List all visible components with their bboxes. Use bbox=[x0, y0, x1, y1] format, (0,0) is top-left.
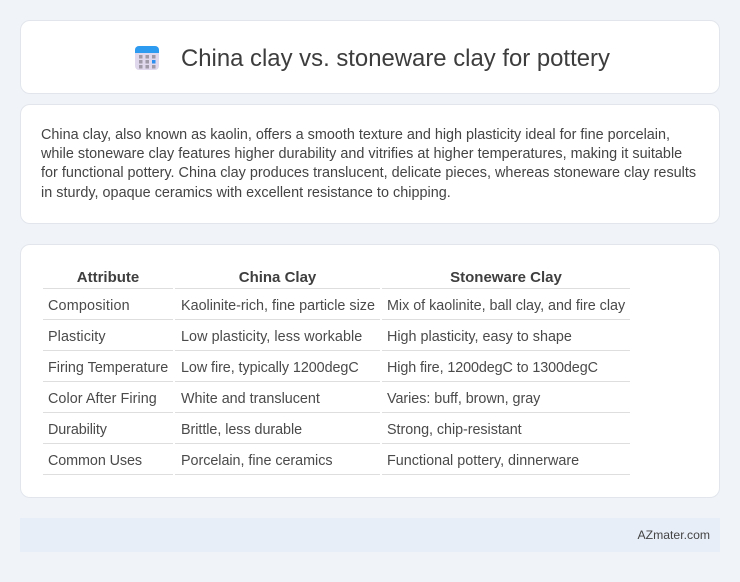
footer bar bbox=[20, 518, 720, 552]
panel: title card bbox=[20, 20, 720, 94]
row: plasticity bbox=[48, 329, 572, 345]
row: common uses: Functional pottery, dinnerware bbox=[387, 453, 579, 469]
icon: calendar bbox=[135, 46, 159, 70]
row: composition: Composition bbox=[48, 298, 130, 314]
row: common uses: Porcelain, fine ceramics bbox=[181, 453, 332, 469]
title: China clay vs. stoneware clay for pottery bbox=[181, 45, 610, 72]
row: firing temperature bbox=[48, 360, 598, 376]
row: plasticity: Low plasticity, less workable bbox=[181, 329, 362, 345]
row: firing temperature: Firing Temperature bbox=[48, 360, 168, 376]
row: durability: Brittle, less durable bbox=[181, 422, 302, 438]
row: composition: Kaolinite-rich, fine particle size bbox=[181, 298, 375, 314]
row: composition: Mix of kaolinite, ball clay, and fire clay bbox=[387, 298, 625, 314]
intro text: while stoneware clay features higher durability and vitrifies at higher temperatures, making it suitable bbox=[41, 146, 682, 162]
table header: China Clay bbox=[239, 269, 316, 286]
table header: Stoneware Clay bbox=[450, 269, 562, 286]
row: composition bbox=[48, 298, 626, 314]
comparison table bbox=[43, 269, 630, 475]
row: firing temperature: High fire, 1200degC to 1300degC bbox=[387, 360, 598, 376]
row: color after firing bbox=[48, 391, 540, 407]
intro text: China clay, also known as kaolin, offers a smooth texture and high plasticity ideal for fine porcelain, bbox=[41, 127, 670, 143]
row: firing temperature: Low fire, typically 1200degC bbox=[181, 360, 359, 376]
row: durability: Strong, chip-resistant bbox=[387, 422, 522, 438]
intro text bbox=[41, 127, 696, 201]
row: color after firing: White and translucent bbox=[181, 391, 320, 407]
panel: intro text card bbox=[20, 104, 720, 224]
footer brand text: AZmater.com bbox=[638, 528, 710, 542]
table header bbox=[77, 269, 562, 286]
row: common uses: Common Uses bbox=[48, 453, 142, 469]
panel: comparison table card bbox=[20, 244, 720, 498]
row: color after firing: Varies: buff, brown, gray bbox=[387, 391, 540, 407]
row: durability bbox=[48, 422, 522, 438]
table header: Attribute bbox=[77, 269, 139, 286]
row: durability: Durability bbox=[48, 422, 107, 438]
intro text: for functional pottery. China clay produces translucent, delicate pieces, whereas stoneware clay results bbox=[41, 165, 696, 181]
intro text: in sturdy, opaque ceramics with excellent resistance to chipping. bbox=[41, 185, 451, 201]
row: plasticity: High plasticity, easy to shape bbox=[387, 329, 572, 345]
row: plasticity: Plasticity bbox=[48, 329, 106, 345]
row: common uses bbox=[48, 453, 579, 469]
row: color after firing: Color After Firing bbox=[48, 391, 157, 407]
